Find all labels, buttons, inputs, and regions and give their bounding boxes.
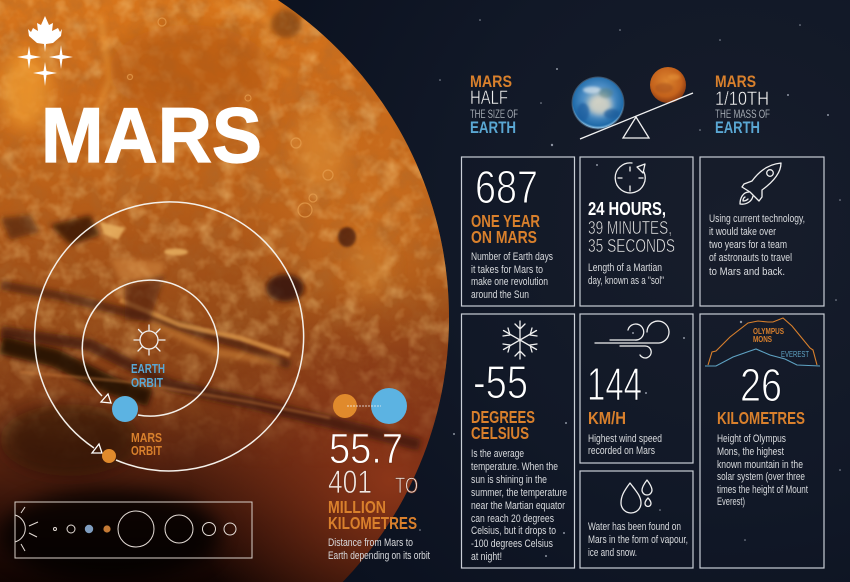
beam and fulcrum [580,93,693,139]
number: 687: 687 [475,161,538,213]
tenth the mass text: THE MASS OF [715,107,770,121]
chart: mountain profiles: MONS [753,335,773,344]
heading: degrees celsius [471,407,535,443]
panel: olympus mons [700,314,824,568]
heading: degrees celsius: CELSIUS [471,423,529,443]
body text [709,213,805,278]
label: earth orbit [131,362,165,390]
body text: Using current technology, [709,213,805,225]
number: 55.7: 55.7 [329,425,403,473]
distance description [328,537,430,562]
panel: travel [700,157,824,306]
half the size text: MARS [470,72,512,91]
mars dot [102,449,116,463]
icon: snowflake [503,321,537,359]
body text: Length of a Martian [588,262,662,274]
body text: recorded on Mars [588,445,655,457]
body text [717,433,808,508]
body text: sun is shining in the [471,474,547,486]
body text [471,448,567,563]
body text: it takes for Mars to [471,264,543,276]
heading: hours: 24 HOURS, [588,199,666,219]
body text: Is the average [471,448,524,460]
icon: clock [615,163,645,193]
body text: of astronauts to travel [709,252,792,264]
panel: temperature [462,314,574,568]
body text [588,262,664,287]
icon: mars and earth distance [333,388,407,424]
half the size text: HALF [470,88,508,109]
body text: -100 degrees Celsius [471,538,553,550]
balance illustration [572,67,693,139]
body text: to Mars and back. [709,266,785,278]
heading: one year on mars: ON MARS [471,227,537,247]
label: million kilometres: KILOMETRES [328,513,417,533]
heading: degrees celsius: DEGREES [471,407,535,427]
panel: day length [580,157,693,306]
panel: water [580,471,693,568]
body text: Mons, the highest [717,446,784,458]
icon: wind [595,321,669,358]
body text: times the height of Mount [717,484,808,496]
chart: mountain profiles [705,318,820,366]
body text: near the Martian equator [471,500,565,512]
label: million kilometres [328,497,417,533]
body text: day, known as a "sol" [588,275,664,287]
arrow: mars [92,444,102,453]
mars small [650,67,686,103]
panel: one year [462,157,574,306]
body text: Number of Earth days [471,251,553,263]
body text: Celsius, but it drops to [471,525,556,537]
heading: one year on mars [471,211,540,247]
heading: kilometres: KILOMETRES [717,408,805,428]
number: 401 to [328,464,418,500]
chart: mountain profiles: OLYMPUS [753,327,785,336]
minutes and seconds [588,218,675,256]
label: mars orbit: ORBIT [131,444,162,458]
chart: mountain profiles: EVEREST [781,350,809,359]
surface features [0,3,420,581]
tenth the mass text: EARTH [715,118,760,137]
body text: around the Sun [471,289,529,301]
body text: solar system (over three [717,471,805,483]
body text: ice and snow. [588,547,637,559]
body text: Highest wind speed [588,433,662,445]
logo: maple leaf and stars [17,16,73,86]
body text: temperature. When the [471,461,558,473]
body text: Everest) [717,496,745,508]
icon: star right [49,45,73,69]
arrow: earth [101,394,111,403]
body text: Mars in the form of vapour, [588,534,688,546]
half the size text: THE SIZE OF [470,107,518,121]
orbit diagram [35,202,304,471]
earth [572,76,624,130]
icon: sun arc [15,507,38,551]
body text: at night! [471,551,502,563]
earth dot [112,396,138,422]
icon: maple leaf [28,16,62,52]
icon: rocket [740,163,781,204]
icon: water drops [621,480,652,513]
number: 26: 26 [740,359,782,411]
planet Mars backdrop [0,0,460,582]
body text [471,251,553,301]
label: mars orbit [131,431,162,458]
label: mars orbit: MARS [131,431,162,445]
icon: sun [134,325,165,355]
planets row [54,511,236,547]
distance block [328,388,430,562]
icon: star bottom [33,62,57,86]
body text: two years for a team [709,239,787,251]
tenth the mass text: MARS [715,72,756,91]
outer orbit [35,202,304,471]
panel: wind [580,314,693,463]
heading: km/h: KM/H [588,408,626,428]
label: million kilometres: MILLION [328,497,386,517]
body text [588,433,662,457]
inner orbit [82,280,218,416]
body text: known mountain in the [717,459,803,471]
half the size text: EARTH [470,118,516,137]
body text [588,521,688,559]
title: MARS [41,91,262,179]
number: 401 to: TO [395,473,418,498]
solar system scale panel [15,502,252,558]
number: 144: 144 [587,358,642,410]
minutes and seconds: 35 SECONDS [588,236,675,256]
body text: Height of Olympus [717,433,786,445]
body text: it would take over [709,226,776,238]
heading: one year on mars: ONE YEAR [471,211,540,231]
body text: summer, the temperature [471,487,567,499]
minutes and seconds: 39 MINUTES, [588,218,672,238]
label: earth orbit: EARTH [131,362,165,376]
tenth the mass text [715,72,770,137]
number: 401 to: 401 [328,464,372,500]
body text: Water has been found on [588,521,681,533]
distance description: Earth depending on its orbit [328,550,430,562]
body text: can reach 20 degrees [471,513,554,525]
number: -55: -55 [473,356,528,408]
tenth the mass text: 1/10TH [715,89,769,110]
distance description: Distance from Mars to [328,537,413,549]
icon: star left [17,46,41,69]
half the size text [470,72,518,137]
label: earth orbit: ORBIT [131,376,163,390]
body text: make one revolution [471,276,548,288]
